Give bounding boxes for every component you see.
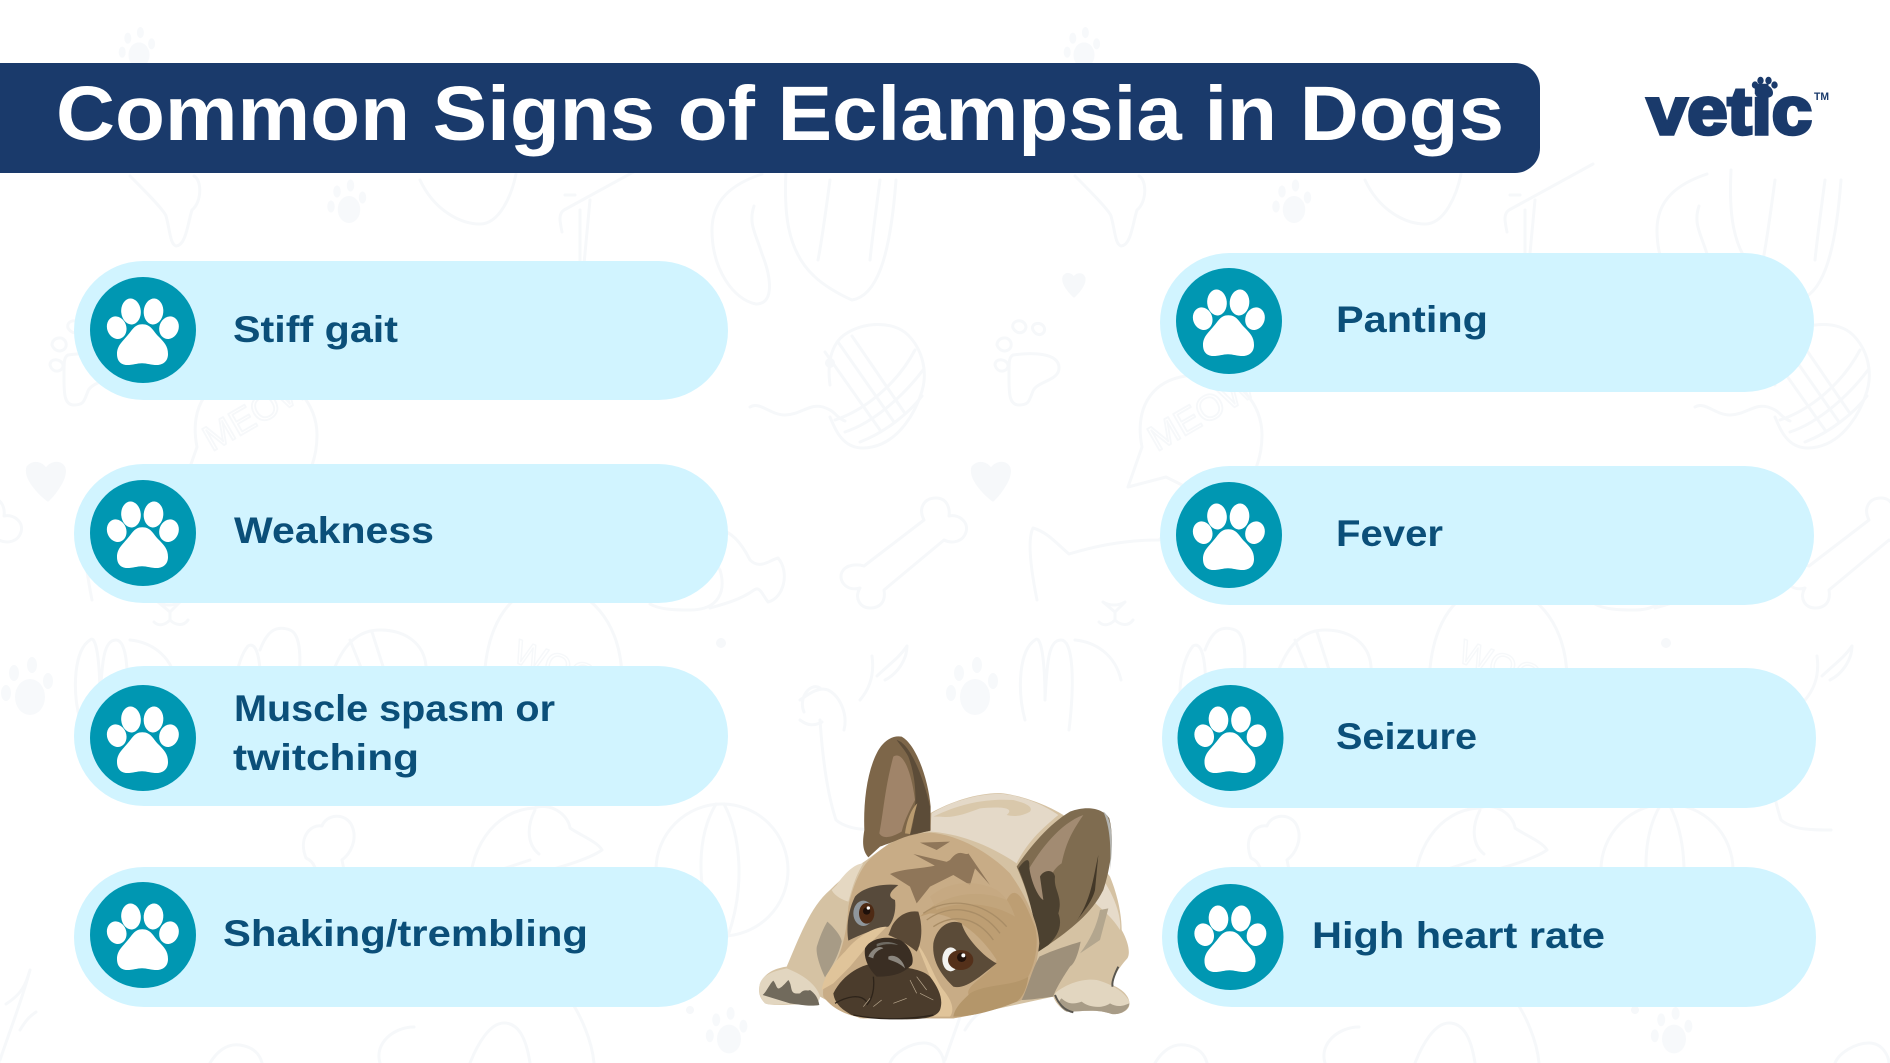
panel: high heart rate [1162, 867, 1816, 1007]
panel: panting [1160, 253, 1814, 392]
panel: weakness [74, 464, 728, 603]
brow wrinkles [923, 903, 1007, 940]
label: Shaking/trembling [223, 913, 588, 954]
label: Muscle spasm or [234, 688, 555, 729]
panel: stiff gait [74, 261, 728, 400]
label: Seizure [1336, 716, 1477, 757]
left ear [863, 736, 931, 857]
left paw [759, 968, 820, 1006]
panel: muscle spasm or twitching [74, 666, 728, 806]
trademark: TM [1814, 91, 1829, 103]
panel: seizure [1162, 668, 1816, 808]
icon: paw [90, 480, 196, 586]
icon: paw [1176, 268, 1282, 374]
right eye [942, 947, 973, 971]
muzzle light [822, 927, 952, 1017]
logo: vetic: vetic [1647, 74, 1812, 149]
left eye [853, 901, 874, 926]
label: Fever [1336, 513, 1443, 554]
muzzle dark [833, 963, 941, 1019]
title banner [0, 63, 1540, 173]
icon: paw [1178, 685, 1284, 791]
dog face shading [920, 893, 1037, 997]
forehead markings [890, 842, 990, 903]
muzzle whisker marks [835, 977, 933, 1019]
right eye patch [933, 922, 997, 987]
icon: paw [1178, 884, 1284, 990]
icon: paw [90, 277, 196, 383]
illustration: french bulldog [759, 736, 1129, 1019]
icon: paw [1176, 482, 1282, 588]
right shoulder shadow [1022, 942, 1081, 1000]
icon: paw [90, 882, 196, 988]
label: High heart rate [1312, 915, 1605, 956]
left eye patch [847, 885, 898, 941]
title: Common Signs of Eclampsia in Dogs [56, 71, 1504, 157]
panel: shaking/trembling [74, 867, 728, 1007]
dog back highlight [930, 794, 1058, 863]
icon: paw [90, 685, 196, 791]
label: twitching [233, 737, 419, 778]
label: Stiff gait [233, 309, 398, 350]
right paw [1055, 967, 1129, 1014]
nose [865, 938, 913, 977]
label [233, 688, 555, 778]
left shoulder shadow [817, 922, 842, 977]
icon: logo paw [1752, 77, 1778, 98]
panel: fever [1160, 466, 1814, 605]
label: Weakness [234, 510, 434, 551]
right ear [1017, 808, 1112, 952]
dog body [759, 793, 1129, 1018]
dog head [823, 833, 1039, 1018]
label: Panting [1336, 299, 1488, 340]
